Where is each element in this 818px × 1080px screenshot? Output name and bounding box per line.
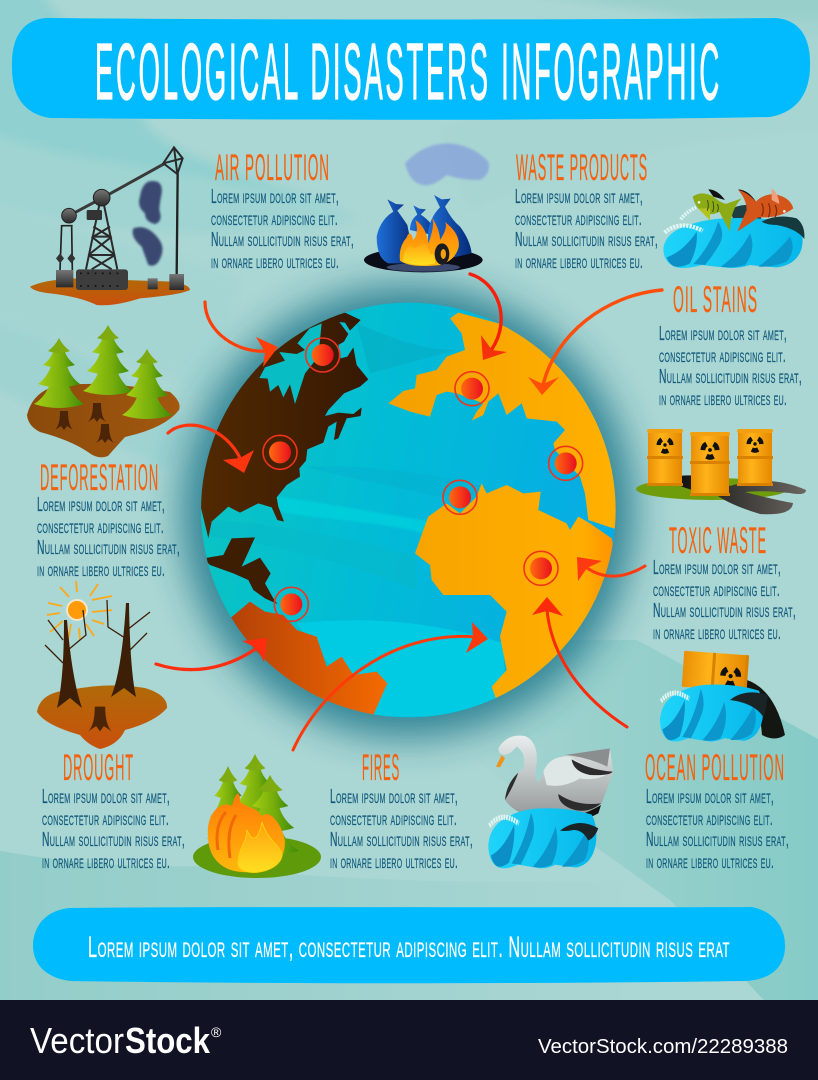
arrow: ocean pollution [532,597,627,727]
text block: in ornare libero ultrices eu. [37,559,165,581]
text block: Lorem ipsum dolor sit amet, [211,186,339,208]
text block [211,186,354,273]
sun [47,581,112,640]
text block [653,557,796,644]
text block: Nullam sollicitudin risus erat, [515,229,658,251]
panel: drought: DROUGHT [63,747,134,788]
text block [515,186,658,273]
panel: fires [193,747,473,878]
text block: Nullam sollicitudin risus erat, [211,229,354,251]
icon: barrel in wave [660,651,785,741]
text block: consectetur adipiscing elit. [42,808,169,830]
text: AIR POLLUTION [215,147,330,188]
text block: consectetur adipiscing elit. [37,516,164,538]
arrow: toxic waste [577,557,645,581]
bottom banner [33,907,785,983]
icon: forest fire [193,754,321,878]
text block [659,323,802,410]
impact markers [263,338,583,621]
icon: deforested island [27,325,180,457]
text block [42,786,185,873]
arrow: fires [293,622,488,750]
globe [201,302,616,718]
watermark url: VectorStock.com/22289388 [538,1036,788,1058]
dead trees [45,600,150,708]
panel: drought [37,581,185,873]
globe glow [182,286,634,738]
icon: oiled swan [488,736,613,868]
panel: deforestation [27,325,180,581]
continent: eurasia [388,313,637,530]
text block: Lorem ipsum dolor sit amet, [330,786,458,808]
watermark logo [30,1020,222,1061]
panel: oil stains [659,279,802,410]
panel: fires: FIRES [362,747,400,788]
continent: south america [231,602,388,714]
continent: africa [415,483,623,701]
text block [646,786,789,873]
arrow: drought [156,638,267,670]
watermark logo: Stock [125,1020,211,1061]
text block: consectetur adipiscing elit. [515,208,642,230]
icon: green fish [693,189,742,232]
continent: polluted north america [197,313,368,538]
foam spray [681,207,696,219]
text: DEFORESTATION [40,457,159,498]
text block: Nullam sollicitudin risus erat, [42,829,185,851]
panel: waste products [364,143,658,273]
text block: Lorem ipsum dolor sit amet, [515,186,643,208]
text block: Nullam sollicitudin risus erat, [330,829,473,851]
icon: orange fish [737,188,793,232]
panel: air pollution [30,147,354,305]
text block: Lorem ipsum dolor sit amet, [42,786,170,808]
icon: toxic barrels [636,429,806,514]
icon: oil pump [30,147,190,305]
title banner [12,18,810,120]
continent: central america [203,537,277,604]
panel: ocean pollution [645,651,789,873]
bay [259,323,322,404]
text block: in ornare libero ultrices eu. [42,851,170,873]
icon: drought island [37,581,167,749]
smoke [133,181,162,266]
footer [0,1000,818,1080]
text block: consectetur adipiscing elit. [330,808,457,830]
panel: fish in polluted water [663,188,804,268]
arrow: waste products [470,274,507,360]
watermark logo: Vector [30,1020,124,1061]
text block: consectetur adipiscing elit. [211,208,338,230]
icon: burning waste [364,143,489,272]
oil behind fish [730,205,762,223]
oil patch [762,216,804,239]
text block: Nullam sollicitudin risus erat, [37,537,180,559]
arrow: oil stains [528,290,662,395]
arrow: deforestation [168,425,254,473]
text block: in ornare libero ultrices eu. [515,251,643,273]
text block: in ornare libero ultrices eu. [330,851,458,873]
text block [330,786,473,873]
text block: Lorem ipsum dolor sit amet, [37,494,165,516]
text block [37,494,180,581]
watermark logo: ® [211,1024,222,1040]
arrow: air pollution [205,302,278,367]
text block: in ornare libero ultrices eu. [211,251,339,273]
panel: toxic waste [653,520,796,644]
